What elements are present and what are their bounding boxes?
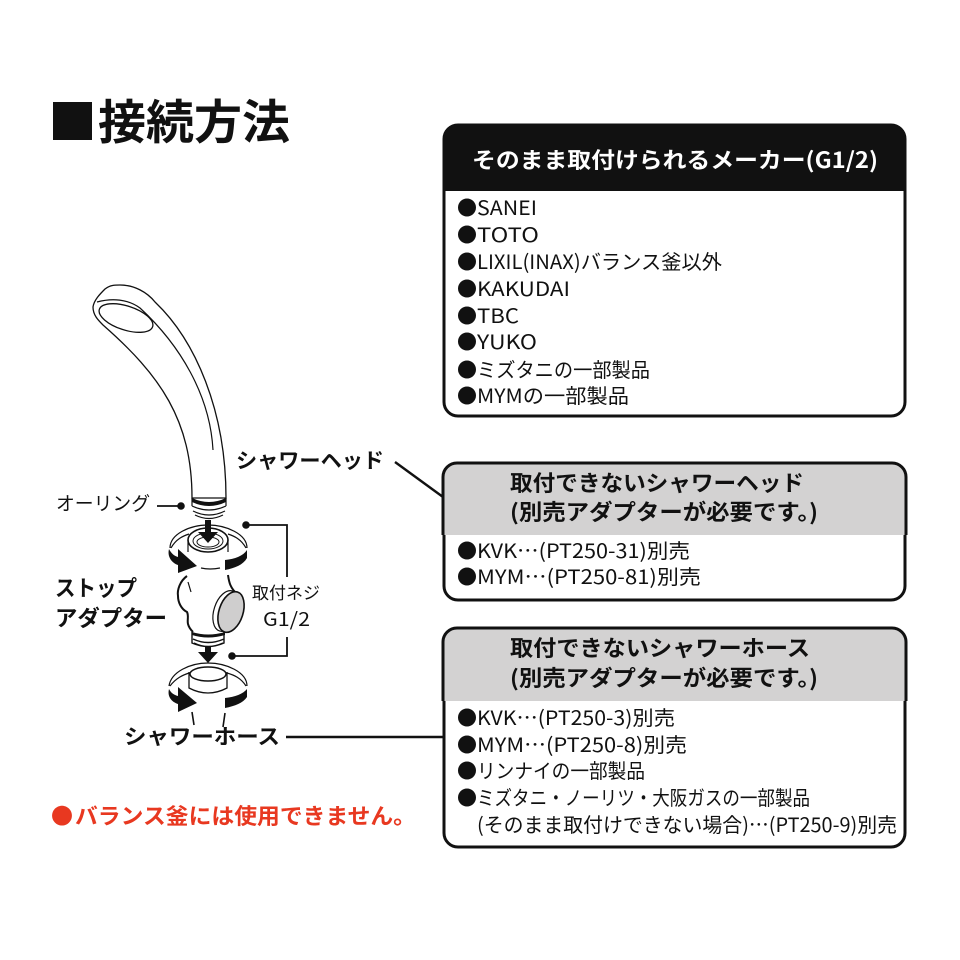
maker list: TBC <box>477 300 519 329</box>
maker list: ● <box>457 300 477 329</box>
panel: incompatible shower hoses <box>443 628 906 847</box>
label: shower head: シャワーヘッド <box>236 445 384 475</box>
maker list: LIXIL(INAX)バランス釜以外 <box>477 246 722 275</box>
shower hose adapter list <box>457 702 897 838</box>
label: stop adapter <box>55 571 167 633</box>
label: shower hose: シャワーホース <box>124 721 280 751</box>
panel: incompatible shower heads <box>443 463 906 600</box>
adapter body <box>178 575 249 646</box>
threaded connector <box>192 498 226 518</box>
maker list: KAKUDAI <box>477 273 570 302</box>
panel: compatible makers <box>443 124 906 416</box>
maker list: TOTO <box>477 219 539 248</box>
maker list: MYMの一部製品 <box>477 380 629 409</box>
arrow: head into adapter <box>198 520 218 543</box>
illustration: stop adapter <box>169 520 249 663</box>
maker list: SANEI <box>477 192 537 221</box>
shower head adapter list: MYM…(PT250-81)別売 <box>477 561 701 590</box>
illustration: shower hose connector <box>169 663 247 727</box>
shower hose adapter list: ● <box>457 729 477 758</box>
shower head adapter list: ● <box>457 535 477 564</box>
shower head adapter list: ● <box>457 561 477 590</box>
title: 接続方法 <box>98 84 290 153</box>
maker list <box>457 192 722 409</box>
maker list: ● <box>457 192 477 221</box>
shower head adapter list: KVK…(PT250-31)別売 <box>477 535 690 564</box>
panel header: shower heads: 取付できないシャワーヘッド <box>510 466 804 498</box>
warning note: バランス釜には使用できません。 <box>75 799 416 831</box>
label: thread size bracket <box>228 521 320 660</box>
panel header: shower heads <box>443 463 906 535</box>
lower thread <box>192 632 224 646</box>
maker list: YUKO <box>476 326 537 355</box>
label: thread size bracket: G1/2 <box>263 605 310 632</box>
shutoff knob <box>208 587 249 636</box>
panel header: compatible makers <box>443 124 906 191</box>
panel header: shower hoses: 取付できないシャワーホース <box>510 631 810 663</box>
maker list: ● <box>457 354 477 383</box>
panel header: compatible makers: そのまま取付けられるメーカー(G1/2) <box>472 143 878 175</box>
label: stop adapter: アダプター <box>55 601 167 633</box>
shower hose adapter list: ミズタニ・ノーリツ・大阪ガスの一部製品 <box>477 782 810 811</box>
label: O-ring: オーリング <box>56 489 150 516</box>
maker list: ● <box>457 273 477 302</box>
label: stop adapter: ストップ <box>55 571 137 603</box>
shower hose adapter list: ● <box>457 782 477 811</box>
maker list: ● <box>457 246 477 275</box>
rotation ring top <box>169 525 247 573</box>
arrow: adapter into hose <box>198 647 218 663</box>
maker list: ● <box>457 219 477 248</box>
maker list: ミズタニの一部製品 <box>477 354 650 383</box>
label: thread size bracket: 取付ネジ <box>252 579 320 604</box>
panel header: shower hoses <box>443 628 906 701</box>
label: shower head <box>236 445 443 497</box>
maker list: ● <box>457 326 477 355</box>
illustration: shower head <box>93 285 226 518</box>
shower hose adapter list: (そのまま取付けできない場合)…(PT250-9)別売 <box>477 809 897 838</box>
warning note: ● <box>51 799 73 831</box>
shower head adapter list <box>457 535 701 590</box>
shower hose adapter list: KVK…(PT250-3)別売 <box>477 702 675 731</box>
panel header: shower heads: (別売アダプターが必要です。) <box>510 495 818 527</box>
shower hose adapter list: MYM…(PT250-8)別売 <box>477 729 687 758</box>
maker list: ● <box>457 380 477 409</box>
shower hose adapter list: リンナイの一部製品 <box>477 755 645 784</box>
panel header: shower hoses: (別売アダプターが必要です。) <box>510 661 818 693</box>
shower hose adapter list: ● <box>457 702 477 731</box>
shower hose adapter list: ● <box>457 755 477 784</box>
